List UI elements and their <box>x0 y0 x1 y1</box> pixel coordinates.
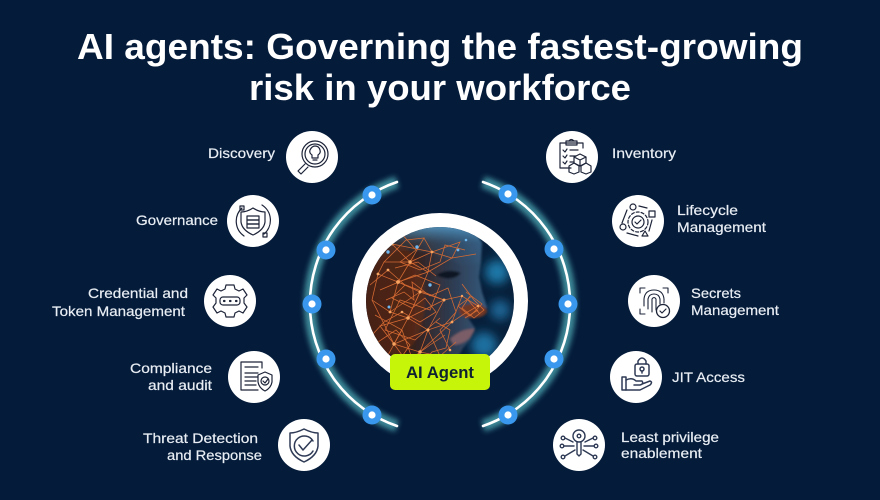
item: Compliance and audit: and audit <box>148 377 212 393</box>
item: JIT Access: JIT Access <box>672 369 745 385</box>
item: Threat Detection and Response: Threat Detection <box>143 430 258 446</box>
item: Governance <box>136 195 279 247</box>
item: Lifecycle Management <box>612 195 766 247</box>
item: Lifecycle Management: Lifecycle <box>677 202 738 218</box>
item: Threat Detection and Response <box>143 419 330 471</box>
AI Agent badge <box>390 354 490 390</box>
item: Inventory: Inventory <box>612 145 676 161</box>
item: Credential and Token Management: Credential and <box>88 285 188 301</box>
AI Agent badge: AI Agent <box>406 363 474 382</box>
item: Lifecycle Management: Management <box>677 219 766 235</box>
item: Least privilege enablement <box>553 419 719 471</box>
item: JIT Access <box>610 351 745 403</box>
item: Least privilege enablement: enablement <box>621 445 702 461</box>
item: Inventory <box>546 131 676 183</box>
item: Discovery: Discovery <box>208 145 275 161</box>
item: Threat Detection and Response: and Response <box>167 447 262 463</box>
item: Discovery <box>208 131 338 183</box>
title: AI agents: Governing the fastest-growing <box>77 26 803 67</box>
right glowing arc with nodes <box>483 182 578 426</box>
item: Credential and Token Management <box>52 275 256 327</box>
item: Compliance and audit: Compliance <box>130 360 212 376</box>
title <box>77 26 803 108</box>
item: Secrets Management: Management <box>691 302 779 318</box>
left glowing arc with nodes <box>302 182 397 426</box>
item: Governance: Governance <box>136 212 218 228</box>
item: Least privilege enablement: Least privilege <box>621 429 719 445</box>
item: Secrets Management <box>628 275 779 327</box>
item: Secrets Management: Secrets <box>691 285 741 301</box>
title: risk in your workforce <box>249 67 631 108</box>
central portrait ring <box>360 220 520 382</box>
item: Credential and Token Management: Token Management <box>52 303 185 319</box>
item: Compliance and audit <box>130 351 280 403</box>
